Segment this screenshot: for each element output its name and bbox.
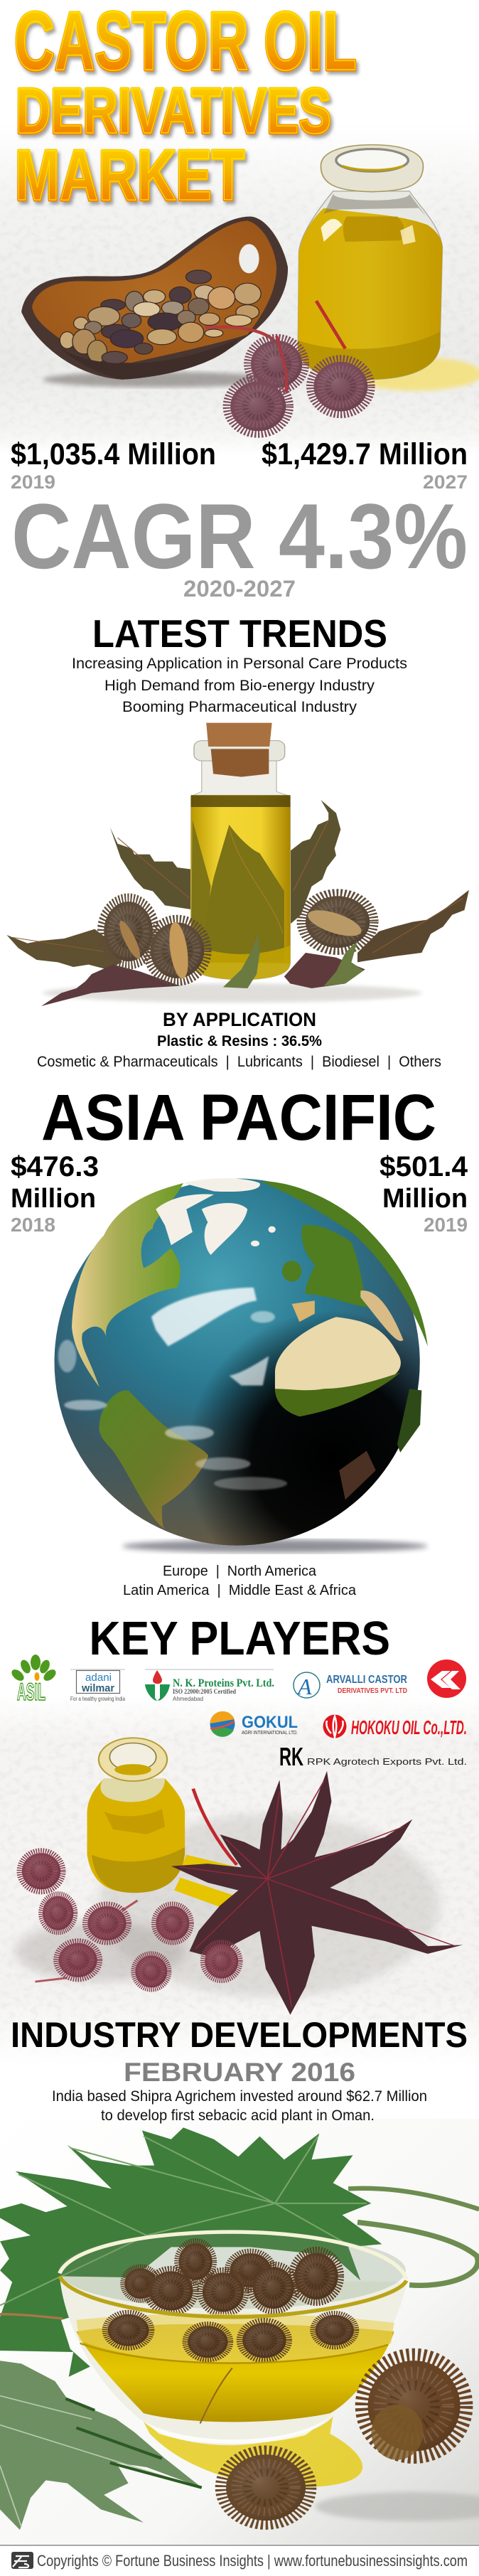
panel: by application bbox=[37, 1009, 441, 1070]
panel: industry developments bbox=[11, 2015, 468, 2124]
stat: 2018 value bbox=[11, 1151, 99, 1236]
continent: North America bbox=[72, 1183, 183, 1387]
label: 2019: 2019 bbox=[11, 471, 55, 493]
logo: Arvalli Castor bbox=[294, 1672, 407, 1699]
title line: Market: MARKET bbox=[15, 136, 244, 215]
logo: Gokul Agri International: GOKUL bbox=[242, 1713, 298, 1732]
stat: 2019 value bbox=[380, 1151, 468, 1236]
icon: back castor leaves bbox=[6, 800, 469, 1006]
logo: N. K. Proteins: Ahmedabad bbox=[173, 1695, 203, 1702]
logo: Gokul Agri International bbox=[210, 1711, 298, 1737]
clouds bbox=[58, 1288, 287, 1490]
icon: glass jar of castor oil bbox=[298, 145, 479, 391]
continent: South America bbox=[99, 1390, 208, 1529]
heading: Asia Pacific: ASIA PACIFIC bbox=[41, 1081, 436, 1154]
logo: ASIL bbox=[9, 1655, 58, 1706]
panel: Asia Pacific region bbox=[11, 1081, 468, 1598]
title line: Derivatives: DERIVATIVES bbox=[16, 76, 331, 147]
logo: red chevrons bbox=[427, 1660, 466, 1698]
stat: plastic and resins share: Plastic & Resins : 36.5% bbox=[157, 1033, 322, 1049]
icon: grey-green lower leaf bbox=[0, 2361, 202, 2530]
list: other regions: Europe | North America bbox=[163, 1564, 317, 1579]
trend 1: Increasing Application in Personal Care Products bbox=[72, 656, 407, 672]
panel: market size figures bbox=[11, 437, 468, 602]
logo: N. K. Proteins bbox=[145, 1669, 274, 1702]
icon: spiky seed capsules bbox=[102, 894, 373, 981]
icon: brown capsule, bottom bbox=[222, 2452, 309, 2524]
text: development description bbox=[52, 2088, 427, 2124]
stat: 2019 value: Million bbox=[382, 1184, 468, 1214]
icon: large green castor leaf bbox=[0, 2127, 479, 2377]
illustration: globe bbox=[55, 1178, 428, 1553]
trend 3: Booming Pharmaceutical Industry bbox=[122, 699, 357, 715]
heading: latest trends: LATEST TRENDS bbox=[92, 611, 387, 656]
stat: 2019 value: $501.4 bbox=[380, 1151, 468, 1182]
trend 2: High Demand from Bio-energy Industry bbox=[104, 678, 375, 694]
list: other applications: Cosmetic & Pharmaceuticals | Lubricants | Biodiesel | Others bbox=[37, 1054, 441, 1070]
logo: ASIL: ASIL bbox=[17, 1679, 45, 1706]
logo: Adani Wilmar bbox=[70, 1669, 125, 1702]
icon: red spiky capsules bbox=[20, 1851, 239, 1989]
heading: key players: KEY PLAYERS bbox=[90, 1612, 390, 1665]
logo: Arvalli Castor: A bbox=[296, 1674, 312, 1699]
icon: Fortune Business Insights logo bbox=[11, 2552, 33, 2569]
footer bbox=[0, 2545, 479, 2576]
logo: RPK Agrotech: RK bbox=[279, 1742, 303, 1771]
heading: by application: BY APPLICATION bbox=[163, 1009, 316, 1030]
continent: Greenland and Arctic ice bbox=[156, 1178, 276, 1255]
panel: latest trends bbox=[72, 611, 407, 715]
logo: Arvalli Castor: DERIVATIVES PVT. LTD bbox=[338, 1687, 407, 1695]
icon: oil jar bbox=[87, 1738, 238, 1908]
logo: Arvalli Castor: ARVALLI CASTOR bbox=[326, 1674, 407, 1686]
stat: 2018 value: 2018 bbox=[11, 1214, 55, 1236]
continent: Africa bbox=[275, 1317, 401, 1412]
icon: glass bowl of oil bbox=[59, 2232, 407, 2487]
shading on sphere bbox=[55, 1179, 420, 1546]
stat: 2018 value: Million bbox=[11, 1184, 96, 1214]
logo: N. K. Proteins: ISO 22000:2005 Certified bbox=[173, 1688, 236, 1695]
icon: spiky purple castor capsules with red stems bbox=[205, 301, 370, 434]
title bbox=[14, 0, 357, 215]
label: 2027: 2027 bbox=[423, 471, 468, 493]
panel: photo of oil bowl with leaves and capsules bbox=[0, 2119, 479, 2545]
date: February 2016: FEBRUARY 2016 bbox=[124, 2058, 355, 2087]
list: other regions bbox=[123, 1564, 357, 1598]
icon: glass vial with cork bbox=[191, 723, 290, 980]
logo: RPK Agrotech: RPK Agrotech Exports Pvt. Ltd. bbox=[307, 1757, 467, 1767]
logo: Adani Wilmar: wilmar bbox=[81, 1682, 114, 1694]
text: development description: to develop first sebacic acid plant in Oman. bbox=[101, 2107, 375, 2124]
icon: large brown capsule, right bbox=[363, 2356, 465, 2460]
text: development description: India based Shipra Agrichem invested around $62.7 Million bbox=[52, 2088, 427, 2105]
stat: 2019 value: 2019 bbox=[424, 1214, 468, 1236]
icon: wooden shell bowl with castor seeds bbox=[21, 216, 288, 388]
logo: Hokoku Oil bbox=[323, 1715, 467, 1738]
icon: dark castor leaf bbox=[171, 1771, 463, 2015]
stat: 2019 value: $1,035.4 Million bbox=[11, 437, 216, 471]
stat: 2018 value: $476.3 bbox=[11, 1151, 99, 1182]
icon: small curled green leaves bbox=[223, 934, 364, 988]
logo: Adani Wilmar: For a healthy growing India bbox=[70, 1696, 125, 1702]
panel: photo of jar, capsules and dark leaf bbox=[0, 1711, 479, 2043]
title line: Market: MARKET bbox=[15, 136, 244, 215]
logo: N. K. Proteins: N. K. Proteins Pvt. Ltd. bbox=[173, 1677, 274, 1689]
title line: Derivatives: DERIVATIVES bbox=[16, 76, 331, 147]
label: CAGR period: 2020-2027 bbox=[183, 576, 296, 602]
continent: Europe and northern band bbox=[259, 1182, 428, 1347]
logo: Adani Wilmar: adani bbox=[85, 1672, 112, 1684]
logo: RPK Agrotech bbox=[279, 1742, 467, 1771]
list: other regions: Latin America | Middle East & Africa bbox=[123, 1583, 357, 1598]
logo: Gokul Agri International: AGRI INTERNATIONAL LTD. bbox=[242, 1731, 298, 1736]
panel: key players bbox=[9, 1612, 467, 1771]
illustration: corked oil bottle with castor leaves bbox=[6, 723, 469, 1006]
panel: hero photo with seeds and oil jar bbox=[0, 144, 479, 444]
